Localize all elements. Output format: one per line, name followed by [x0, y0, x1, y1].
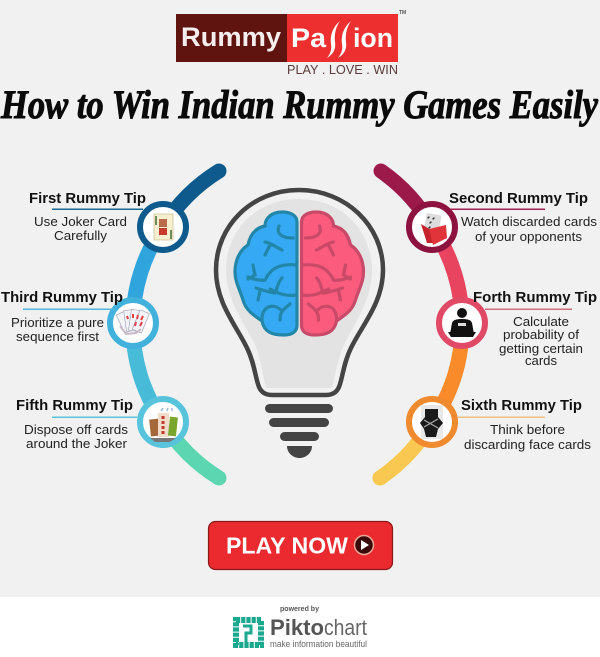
description: [464, 422, 591, 452]
description: [499, 314, 583, 368]
description: sequence first: [16, 329, 99, 344]
description: getting certain: [499, 341, 583, 356]
heading: Third Rummy Tip: [1, 290, 123, 306]
connector: [52, 416, 137, 418]
play now button: [208, 522, 392, 570]
brain left hemisphere: [235, 212, 297, 335]
bulb outline: [216, 190, 383, 395]
logo: Rummy Passion: TM: [399, 10, 406, 16]
description: Calculate: [513, 314, 569, 329]
icon: red and grey cards: [409, 204, 455, 250]
tip 2: [409, 191, 597, 250]
description: Prioritize a pure: [11, 315, 104, 330]
connector: [23, 308, 115, 310]
tip 6: [409, 398, 591, 452]
bulb glass: [226, 199, 372, 388]
heading: Fifth Rummy Tip: [16, 398, 133, 414]
heading: First Rummy Tip: [29, 191, 146, 207]
icon: black king card: [409, 399, 455, 445]
description: of your opponents: [475, 229, 582, 244]
description: [11, 315, 104, 344]
right arc: [380, 171, 462, 478]
description: Dispose off cards: [24, 422, 128, 437]
description: Use Joker Card: [34, 214, 127, 229]
description: [24, 422, 128, 451]
tip 4: [439, 290, 597, 368]
footer: piktochart: Pikto: [270, 615, 324, 640]
description: cards: [525, 353, 557, 368]
connector: [52, 208, 143, 210]
logo: Rummy Passion: Rummy: [181, 22, 281, 52]
footer: piktochart: [236, 604, 367, 649]
icon: person at table: [439, 300, 485, 346]
logo: Rummy Passion: [176, 10, 406, 77]
tip 5: [16, 398, 186, 451]
brain right hemisphere: [302, 212, 364, 335]
icon: fan of cards: [110, 300, 156, 346]
description: [461, 214, 597, 244]
logo: Rummy Passion: Pa: [291, 23, 327, 53]
description: around the Joker: [26, 436, 128, 451]
connector: [485, 308, 572, 310]
description: probability of: [503, 327, 579, 342]
connector: [450, 208, 545, 210]
play now button: PLAY NOW: [226, 532, 349, 558]
footer: piktochart: chart: [324, 615, 367, 640]
heading: Sixth Rummy Tip: [461, 398, 582, 414]
logo: Rummy Passion: ion: [353, 23, 393, 53]
footer: piktochart: make information beautiful: [270, 639, 367, 649]
connector: [458, 416, 545, 418]
heading: Forth Rummy Tip: [473, 290, 597, 306]
logo: Rummy Passion: PLAY . LOVE . WIN: [287, 62, 398, 77]
description: Carefully: [54, 228, 107, 243]
heading: Second Rummy Tip: [449, 191, 588, 207]
icon: piktochart mark: [236, 620, 261, 645]
left arc: [133, 171, 219, 478]
description: discarding face cards: [464, 437, 591, 452]
tip 1: [29, 191, 186, 250]
light bulb with brain: [216, 190, 383, 458]
description: Watch discarded cards: [461, 214, 597, 229]
footer: piktochart: powered by: [280, 604, 320, 613]
icon: play: [354, 536, 374, 554]
bulb base: [265, 404, 333, 458]
tip 3: [1, 290, 156, 346]
description: [34, 214, 127, 243]
icon: cards on table: [140, 399, 186, 445]
description: Think before: [490, 422, 565, 437]
icon: joker card: [140, 204, 186, 250]
